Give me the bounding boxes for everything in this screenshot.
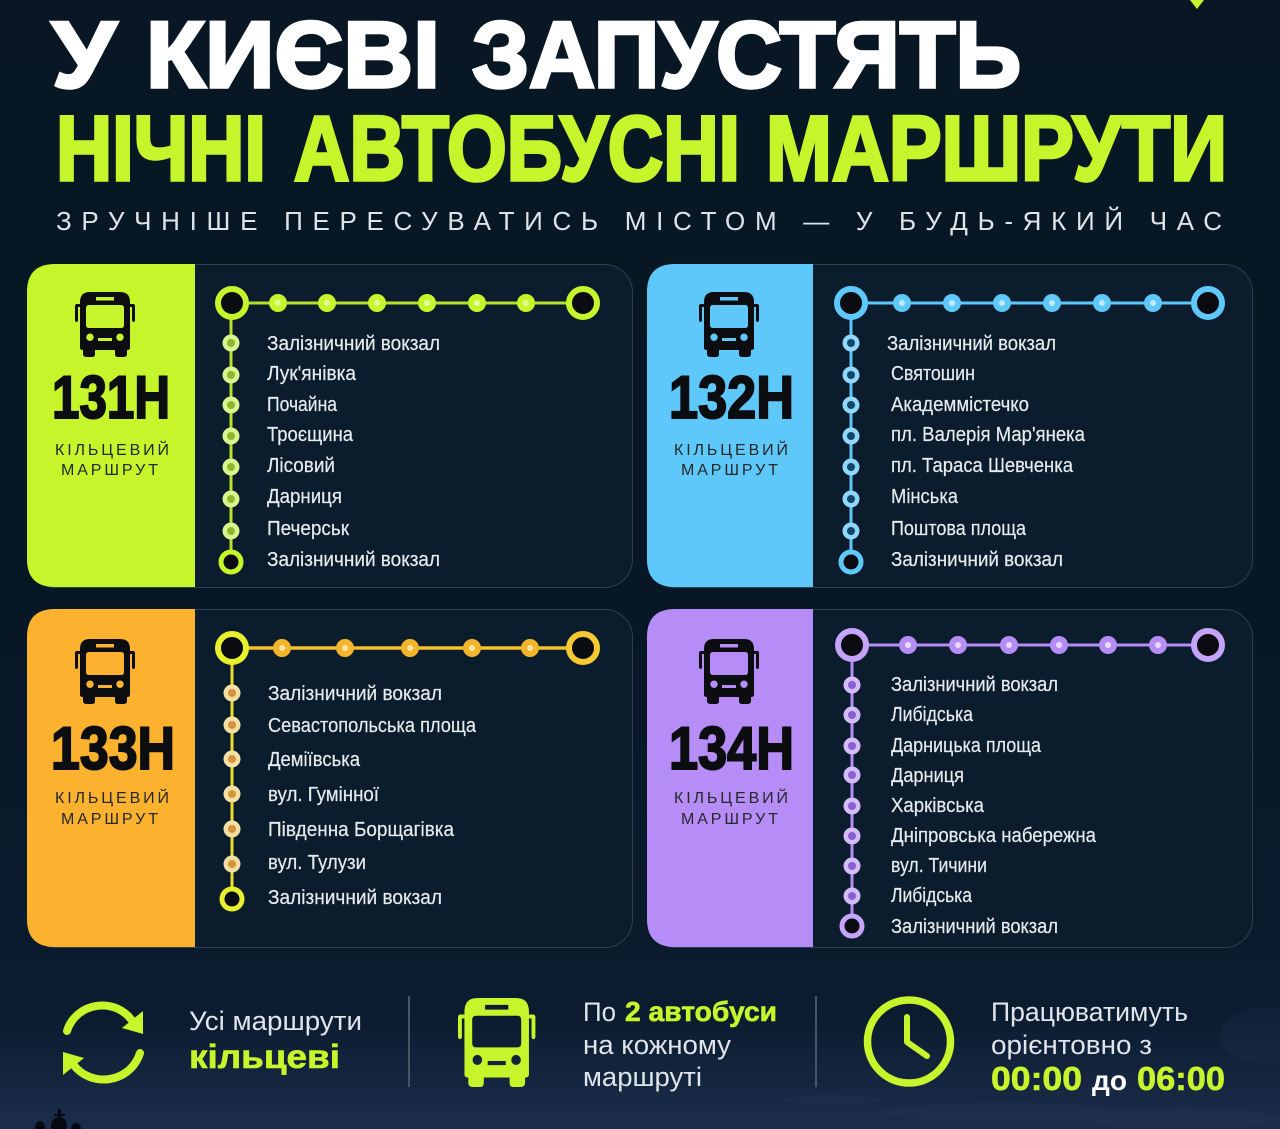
title line 2 [56,98,1227,200]
church silhouette [35,1109,81,1129]
caption 131H [55,440,169,479]
stop list 132H: Академмістечко [891,394,1029,416]
title line 1: КИЄВІ [146,2,440,107]
stop list 132H: Мінська [891,486,959,508]
route diagram 134H [838,631,1222,936]
text: two buses per route: на кожному [583,1030,731,1060]
panel: route 132H [647,264,1252,588]
caption 133H: КІЛЬЦЕВИЙ [55,788,169,807]
text: working hours [991,997,1225,1097]
stop list 134H [891,674,1097,938]
stop list 132H: Залізничний вокзал [891,549,1063,571]
stop list 131H: Лук'янівка [267,363,357,385]
route number 133H: 133Н [51,715,175,782]
caption 132H: МАРШРУТ [681,462,778,479]
stop list 132H: Поштова площа [891,518,1027,540]
caption 134H: МАРШРУТ [681,811,778,828]
text: two buses per route: 2 автобуси [625,996,777,1027]
stop list 134H: Харківська [891,795,985,817]
title line 1 [52,2,1021,107]
stop list 133H: Деміївська [268,749,361,771]
logo tip top right [1190,0,1204,9]
icon: circular arrows [63,1005,143,1080]
stop list 134H: вул. Тичини [891,855,987,877]
stop list 131H: Почайна [267,394,338,416]
stop list 132H: Святошин [891,363,975,385]
divider [815,996,817,1087]
stop list 131H: Залізничний вокзал [267,549,440,571]
subtitle: ЗРУЧНІШЕ ПЕРЕСУВАТИСЬ МІСТОМ — У БУДЬ-ЯКИЙ ЧАС [56,206,1222,236]
stop list 131H: Троєщина [267,424,354,446]
route diagram 131H [218,289,597,572]
route number 132H: 132Н [669,364,794,431]
title line 2: АВТОБУСНІ [294,98,740,200]
stop list 134H: Либідська [891,704,974,726]
icon: bus 133H [75,639,135,704]
stop list 134H: Дарниця [891,765,964,787]
route diagram 133H [218,634,597,909]
stop list 134H: Дніпровська набережна [891,825,1097,847]
title line 1: У [52,2,118,107]
clouds in night sky [780,1007,1280,1128]
icon: bus 131H [75,292,135,357]
caption 133H [55,788,169,828]
stop list 134H: Залізничний вокзал [891,916,1058,938]
route diagram 132H [837,289,1222,572]
stop list 133H: вул. Тулузи [268,852,366,874]
caption 133H: МАРШРУТ [61,811,158,828]
text: working hours: 06:00 [1137,1060,1225,1097]
text: working hours: до [1092,1065,1127,1096]
text: two buses per route: маршруті [583,1062,702,1092]
caption 132H: КІЛЬЦЕВИЙ [674,440,788,459]
route number 131H: 131Н [52,364,170,431]
stop list 133H: Південна Борщагівка [268,819,455,841]
title line 2: НІЧНІ [56,98,266,200]
stop list 131H: Печерськ [267,518,349,540]
stop list 132H: Залізничний вокзал [887,333,1056,355]
text: working hours: орієнтовно з [991,1030,1152,1060]
text: all routes circular [189,1006,362,1075]
route number 134H: 134Н [669,715,794,782]
panel: route 134H [647,609,1252,948]
stop list 133H [268,683,477,909]
icon: clock [868,1000,950,1083]
panel: route 133H [27,609,632,948]
caption 134H: КІЛЬЦЕВИЙ [674,788,788,807]
stop list 133H: вул. Гумінної [268,784,379,806]
text: all routes circular: кільцеві [189,1038,340,1075]
stop list 131H: Залізничний вокзал [267,333,440,355]
stop list 132H: пл. Тараса Шевченка [891,455,1074,477]
text: working hours: 00:00 [991,1060,1082,1097]
stop list 133H: Залізничний вокзал [268,887,442,909]
stop list 132H [887,333,1086,571]
divider [408,996,410,1087]
stop list 131H: Дарниця [267,486,342,508]
stop list 134H: Дарницька площа [891,735,1042,757]
caption 131H: КІЛЬЦЕВИЙ [55,440,169,459]
caption 134H [674,788,788,828]
stop list 133H: Залізничний вокзал [268,683,442,705]
stop list 131H [267,333,440,571]
caption 132H [674,440,788,479]
panel: route 131H [27,264,632,588]
icon: bus 134H [699,639,759,704]
icon: bus 132H [699,292,759,357]
title line 1: ЗАПУСТЯТЬ [472,2,1021,107]
stop list 134H: Залізничний вокзал [891,674,1058,696]
stop list 133H: Севастопольська площа [268,715,477,737]
icon: green bus [458,998,535,1087]
text: two buses per route [583,996,777,1092]
stop list 132H: пл. Валерія Мар'янека [891,424,1086,446]
stop list 131H: Лісовий [267,455,335,477]
stop list 134H: Либідська [891,885,973,907]
caption 131H: МАРШРУТ [61,462,158,479]
text: working hours: Працюватимуть [991,997,1188,1027]
text: two buses per route: По [583,997,616,1027]
text: all routes circular: Усі маршрути [189,1006,362,1036]
